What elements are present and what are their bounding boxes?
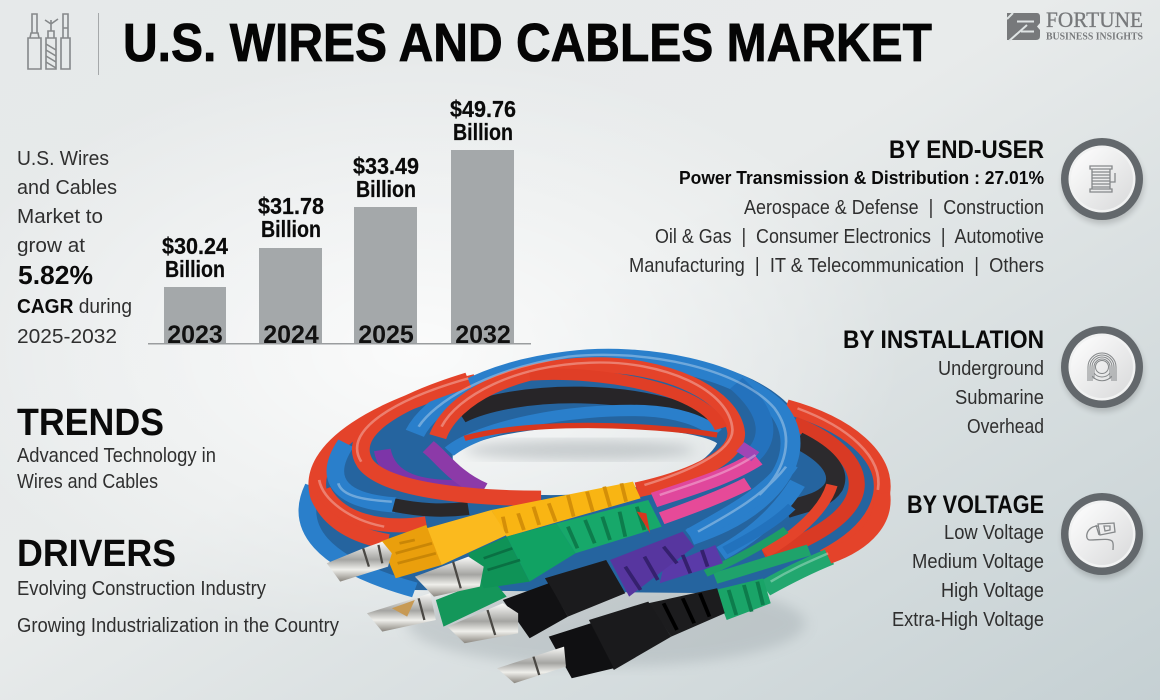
bar chart: 2032 [455, 321, 511, 349]
back cables [307, 355, 884, 593]
icon: wires and cables [28, 14, 70, 69]
header divider [98, 13, 99, 75]
by end-user: Oil & Gas | Consumer Electronics | Automotive [655, 226, 1044, 248]
yellow connector [327, 482, 641, 582]
by installation: Underground [938, 358, 1044, 380]
drivers: Growing Industrialization in the Country [17, 615, 339, 637]
icon: spool badge [1061, 138, 1144, 224]
logo: Fortune Business Insights: BUSINESS INSIGHTS [1046, 32, 1143, 42]
by voltage [892, 491, 1044, 631]
CAGR text block: Market to [17, 206, 103, 228]
drivers [17, 533, 339, 637]
green connector [415, 500, 662, 597]
bar chart: $49.76 [450, 96, 516, 122]
bar chart: 2023 [167, 321, 223, 349]
by end-user: Aerospace & Defense | Construction [744, 197, 1044, 219]
by voltage: High Voltage [941, 580, 1044, 602]
logo: Fortune Business Insights [1007, 7, 1143, 42]
trends: TRENDS [17, 402, 164, 444]
black and green connector [497, 578, 771, 683]
by installation [843, 326, 1044, 438]
bar chart: 2025 [358, 321, 414, 349]
by end-user [629, 136, 1044, 277]
bar chart: 2024 [263, 321, 319, 349]
bar chart: Billion [165, 256, 225, 282]
by voltage: Low Voltage [944, 522, 1044, 544]
by end-user: BY END-USER [889, 136, 1044, 164]
by voltage: BY VOLTAGE [907, 491, 1044, 519]
product photo: coiled colored cables [307, 355, 884, 683]
bar chart: $33.49 [353, 153, 419, 179]
bar chart [148, 96, 531, 349]
drivers: Evolving Construction Industry [17, 578, 266, 600]
bar chart: $30.24 [162, 233, 228, 259]
by installation: Overhead [967, 416, 1044, 438]
CAGR text block: U.S. Wires [17, 148, 109, 170]
CAGR text block: 5.82% [18, 260, 93, 290]
CAGR text block: and Cables [17, 177, 117, 199]
by end-user: Power Transmission & Distribution : 27.01% [679, 168, 1044, 188]
bar chart: Billion [453, 119, 513, 145]
CAGR text block [17, 148, 132, 348]
trends [17, 402, 216, 493]
CAGR text block: grow at [17, 235, 85, 257]
bar chart: $31.78 [258, 193, 324, 219]
by voltage: Extra-High Voltage [892, 609, 1044, 631]
floor shadow [407, 440, 805, 667]
trends: Wires and Cables [17, 471, 158, 493]
title: U.S. WIRES AND CABLES MARKET [123, 13, 932, 73]
icon: cable coil badge [1061, 326, 1144, 412]
by end-user: Manufacturing | IT & Telecommunication | Others [629, 255, 1044, 277]
by installation: BY INSTALLATION [843, 326, 1044, 354]
bar chart: Billion [356, 176, 416, 202]
bar chart: Billion [261, 216, 321, 242]
trends: Advanced Technology in [17, 445, 216, 467]
cable highlights [319, 355, 878, 582]
icon: plug badge [1061, 493, 1144, 579]
logo: Fortune Business Insights: FORTUNE [1046, 7, 1143, 32]
by installation: Submarine [955, 387, 1044, 409]
drivers: DRIVERS [17, 533, 176, 575]
lower green connector [367, 578, 507, 632]
CAGR text block: 2025-2032 [17, 326, 117, 348]
CAGR text block: CAGR during [17, 296, 132, 318]
by voltage: Medium Voltage [912, 551, 1044, 573]
black and purple connector [447, 532, 723, 643]
